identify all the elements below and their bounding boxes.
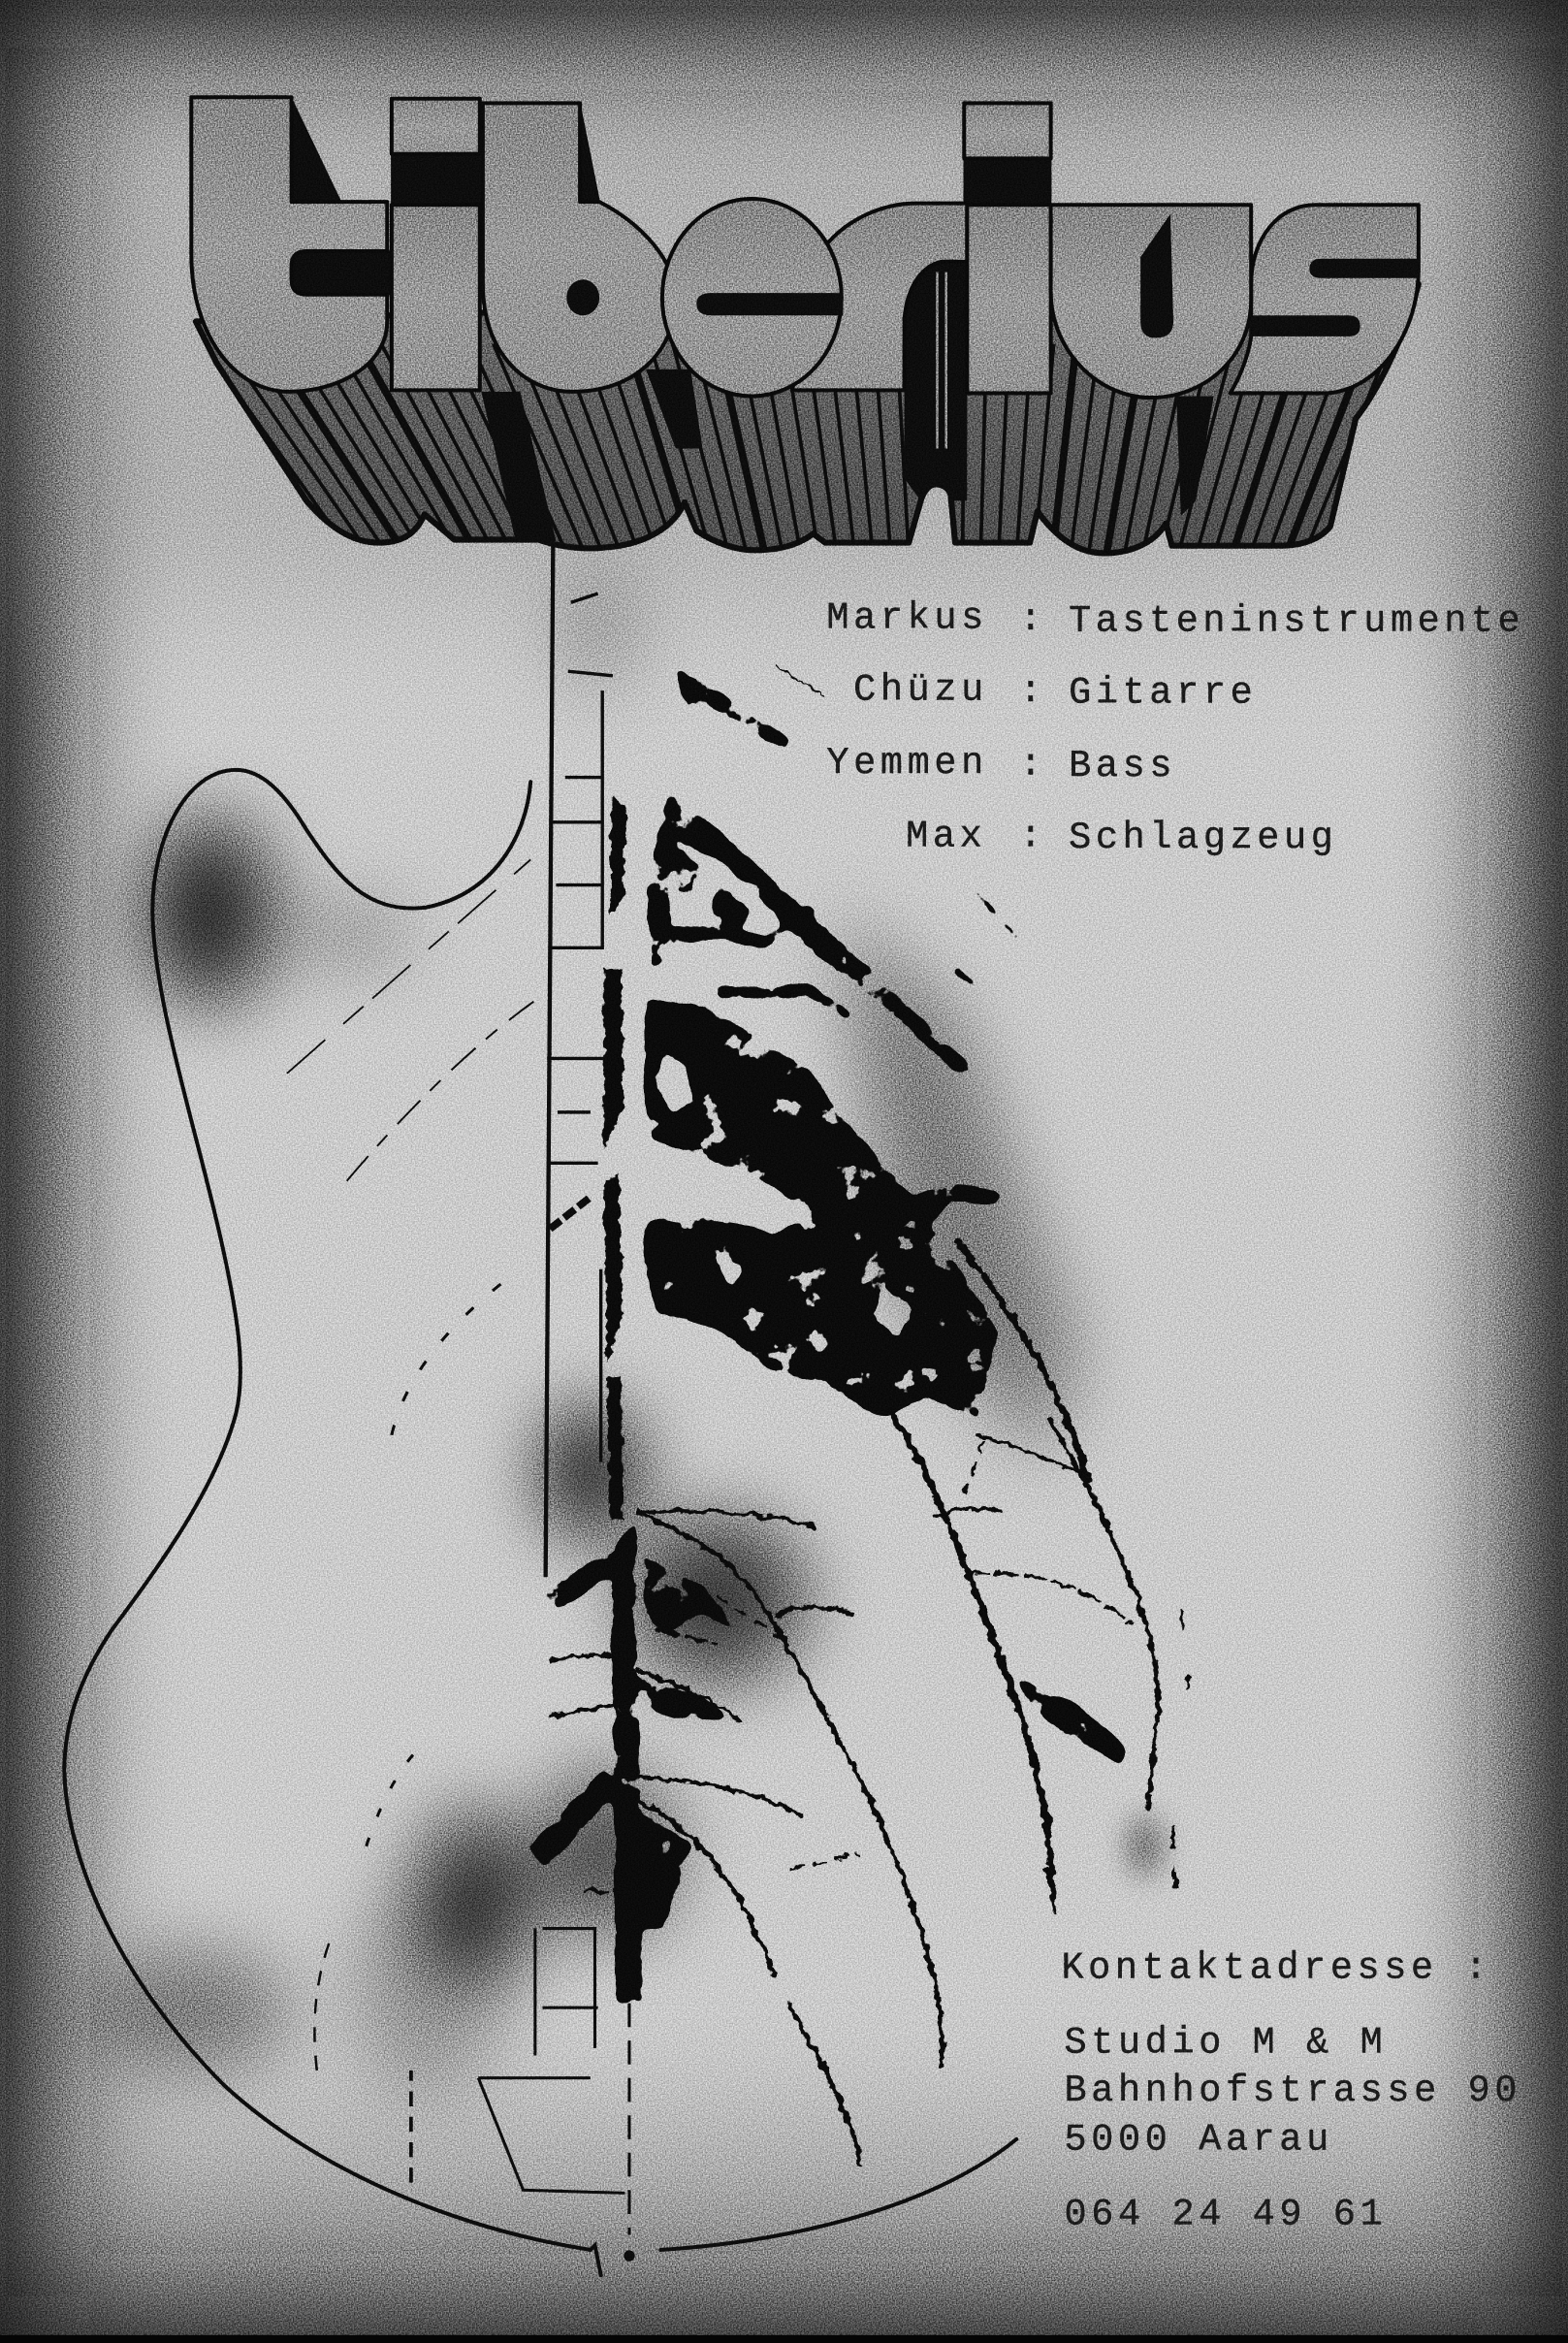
logo extrusion	[196, 262, 1419, 556]
member: Yemmen: Bass	[1069, 745, 1176, 787]
contact street address	[1065, 2021, 1521, 2162]
contact street address: Bahnhofstrasse 90	[1065, 2070, 1521, 2112]
contact address	[1061, 1946, 1521, 2236]
member: Max: :	[1019, 815, 1046, 857]
logo letter faces	[191, 97, 1419, 398]
foliage: ribs and veins	[550, 665, 1188, 2164]
logo: tiberius	[191, 97, 1420, 556]
member: Chüzu: Gitarre	[1069, 672, 1257, 715]
logo counters and slots	[566, 213, 1420, 337]
member: Yemmen: :	[1019, 744, 1046, 786]
band members	[826, 596, 1524, 859]
contact phone: 064 24 49 61	[1065, 2194, 1387, 2236]
foliage: ink masses	[527, 668, 1129, 2004]
contact street address: Studio M & M	[1065, 2021, 1387, 2064]
member: Markus	[826, 596, 1524, 643]
logo black shadows	[292, 99, 1051, 295]
contact street address: 5000 Aarau	[1065, 2119, 1333, 2162]
member: Chüzu: :	[1019, 670, 1046, 713]
bottom edge	[0, 2335, 1568, 2343]
member: Chüzu	[853, 668, 1257, 715]
member: Markus: Tasteninstrumente	[1069, 600, 1524, 643]
member: Max	[906, 815, 1338, 859]
contact heading: Kontaktadresse :	[1061, 1946, 1491, 1989]
member: Yemmen	[826, 742, 1176, 787]
small airbrush spot	[1130, 1816, 1160, 1877]
guitar neck	[546, 546, 626, 1577]
member: Markus: Markus	[826, 596, 988, 639]
member: Max: Schlagzeug	[1069, 817, 1338, 859]
neck fret bars	[604, 797, 626, 1521]
member: Yemmen: Yemmen	[826, 742, 988, 785]
member: Markus: :	[1019, 598, 1046, 641]
member: Max: Max	[906, 815, 986, 857]
guitar details: pickups, bridge, dashed lines	[287, 859, 629, 2235]
member: Chüzu: Chüzu	[853, 668, 988, 711]
guitar body outline	[64, 770, 1016, 2275]
airbrush shadows	[82, 561, 1076, 2093]
